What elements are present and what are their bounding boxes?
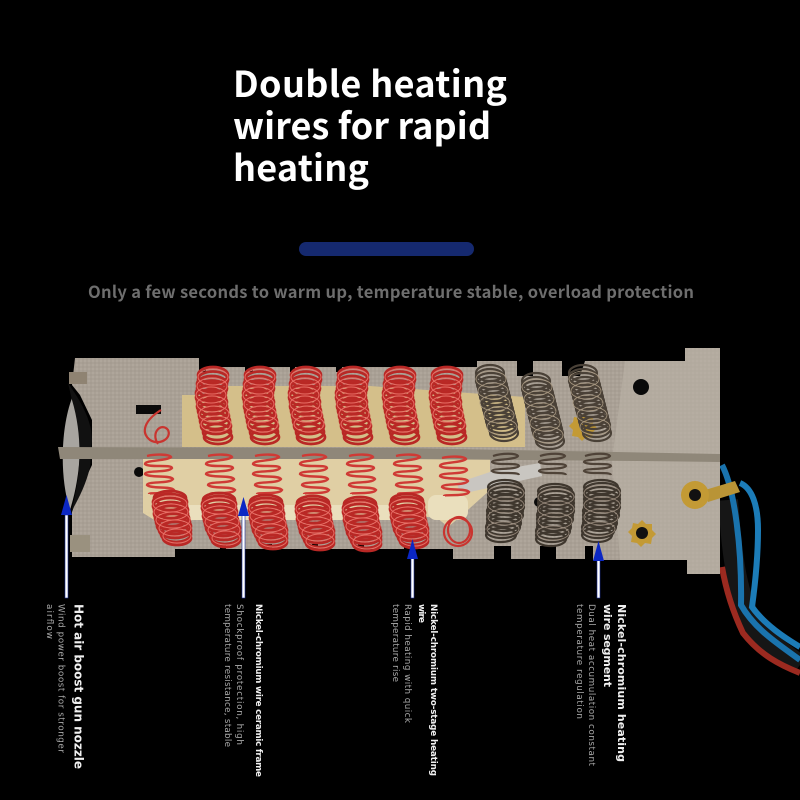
- label: hot air nozzle: airflow: [44, 604, 54, 639]
- lower ceramic frame: [143, 456, 490, 527]
- nozzle: [63, 372, 92, 552]
- label: hot air nozzle: Hot air boost gun nozzle: [72, 604, 86, 769]
- label: wire segment: Nickel-chromium heating: [615, 604, 628, 762]
- accent bar: [299, 242, 474, 256]
- label: hot air nozzle: [44, 604, 86, 769]
- label: hot air nozzle: Wind power boost for stronger: [56, 604, 66, 753]
- subtitle: Only a few seconds to warm up, temperature stable, overload protection: [88, 279, 694, 303]
- title: heating: [233, 140, 369, 192]
- label: two-stage wire: wire: [416, 604, 426, 623]
- label: two-stage wire: [390, 604, 438, 776]
- title: [233, 56, 507, 192]
- upper ceramic frame: [182, 386, 525, 447]
- label: ceramic frame: temperature resistance, stable: [222, 604, 232, 747]
- small red loops: [145, 410, 472, 546]
- arrow: nozzle: [61, 495, 72, 598]
- wires: [722, 465, 800, 673]
- ceramic mica plate: [72, 348, 720, 574]
- brown coils bottom: [486, 480, 620, 546]
- brown coils top: [476, 365, 611, 449]
- label: two-stage wire: Rapid heating with quick: [402, 604, 412, 724]
- brass ring terminal: [681, 481, 740, 509]
- arrow: ceramic frame: [238, 497, 249, 598]
- brown coils middle: [492, 454, 611, 475]
- label: wire segment: temperature regulation: [574, 604, 584, 719]
- red coils bottom: [153, 491, 428, 551]
- label: ceramic frame: Shockproof protection, high: [234, 604, 244, 745]
- label: ceramic frame: [222, 604, 263, 777]
- heating element assembly: [58, 348, 740, 574]
- title: Double heating: [233, 56, 507, 108]
- arrow: wire segment: [593, 541, 604, 598]
- white insulation tube: [457, 463, 542, 492]
- title: wires for rapid: [233, 98, 491, 150]
- central rod: [58, 447, 720, 462]
- red coils top: [196, 367, 466, 444]
- label: ceramic frame: Nickel-chromium wire ceramic frame: [253, 604, 263, 777]
- holes: [134, 379, 649, 507]
- label: two-stage wire: Nickel-chromium two-stage heating: [428, 604, 438, 776]
- label: wire segment: [574, 604, 628, 767]
- label: wire segment: wire segment: [601, 604, 614, 687]
- lower frame teeth: [184, 495, 468, 520]
- arrow: two-stage wire: [407, 539, 418, 598]
- right plate lighter area: [600, 348, 720, 574]
- red coils middle: [145, 455, 469, 496]
- gold lower star eyelet: [628, 520, 656, 547]
- gold upper star: [569, 414, 597, 441]
- label: wire segment: Dual heat accumulation constant: [586, 604, 596, 767]
- label: two-stage wire: temperature rise: [390, 604, 400, 682]
